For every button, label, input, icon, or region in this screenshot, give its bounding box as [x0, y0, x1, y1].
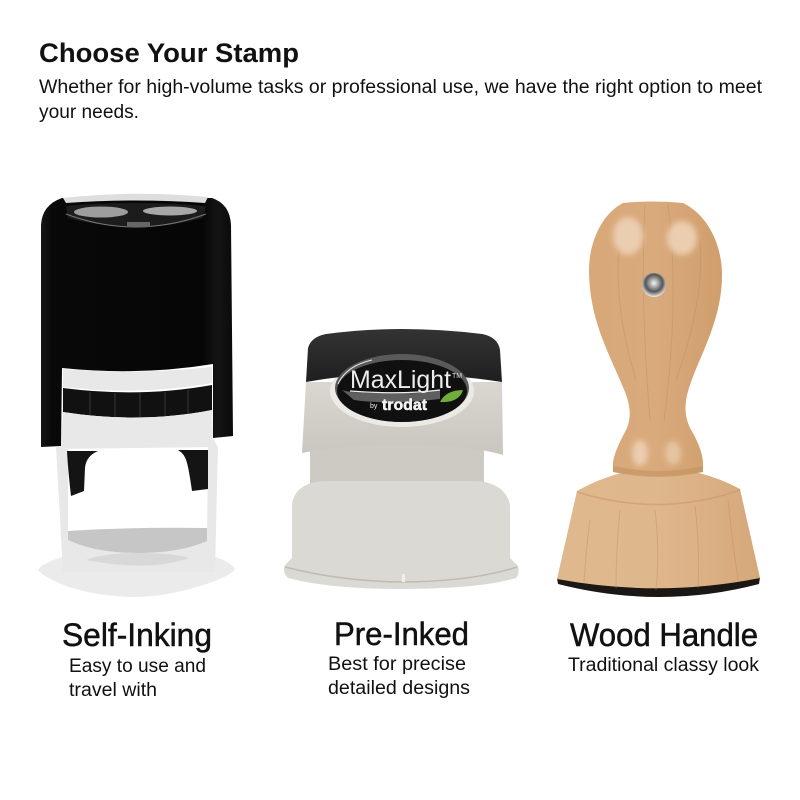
- handle highlights: [613, 217, 697, 466]
- black pad: [557, 577, 760, 597]
- leaf: [440, 390, 463, 402]
- grain lines: [584, 205, 738, 590]
- logo halo: [330, 355, 474, 427]
- intro text: your needs.: [39, 102, 139, 123]
- self-inking stamp: [38, 194, 235, 597]
- label: wood handle: [568, 617, 759, 676]
- round base: [284, 481, 519, 589]
- oval logo: trodat: [382, 397, 428, 414]
- oval logo: by: [370, 403, 378, 410]
- wood handle: [589, 202, 722, 476]
- title: Choose Your Stamp: [39, 38, 299, 68]
- black housing: [41, 198, 233, 447]
- label: self-inking: Self-Inking: [62, 617, 212, 653]
- intro text: [39, 77, 763, 123]
- label: wood handle: Traditional classy look: [568, 655, 759, 676]
- oval logo: TM: [452, 373, 462, 380]
- inner black arms: [67, 451, 98, 496]
- grey body: [302, 382, 503, 455]
- intro text: Whether for high-volume tasks or professional use, we have the right option to meet: [39, 77, 763, 98]
- neck: [310, 430, 484, 487]
- black ratchet ring: [63, 385, 212, 418]
- white lower band: [56, 410, 218, 449]
- label: self-inking: travel with: [69, 680, 157, 701]
- white upper band: [63, 367, 212, 391]
- oval logo: [335, 354, 469, 422]
- frame ring: [56, 447, 218, 572]
- base notch: [402, 574, 405, 582]
- base inner ellipse: [86, 553, 189, 566]
- label: pre-inked: Best for precise: [328, 654, 466, 675]
- black cap: [306, 329, 502, 382]
- label: self-inking: Easy to use and: [69, 656, 206, 677]
- label: self-inking: [62, 617, 212, 701]
- label: wood handle: Wood Handle: [570, 617, 758, 653]
- base rim line: [285, 567, 517, 582]
- oval logo: MaxLight: [350, 366, 451, 394]
- base plate: [38, 557, 235, 597]
- label: pre-inked: detailed designs: [328, 678, 470, 699]
- metal ball: [642, 273, 666, 297]
- wood handle stamp: [557, 202, 760, 597]
- pre-inked stamp: [284, 329, 519, 589]
- base recess: [68, 528, 207, 553]
- collar shadow: [613, 466, 703, 477]
- label: pre-inked: Pre-Inked: [334, 616, 469, 652]
- top recess: [66, 203, 206, 227]
- wood base: [557, 472, 760, 588]
- top light strip: [63, 194, 208, 203]
- label: pre-inked: [328, 616, 470, 699]
